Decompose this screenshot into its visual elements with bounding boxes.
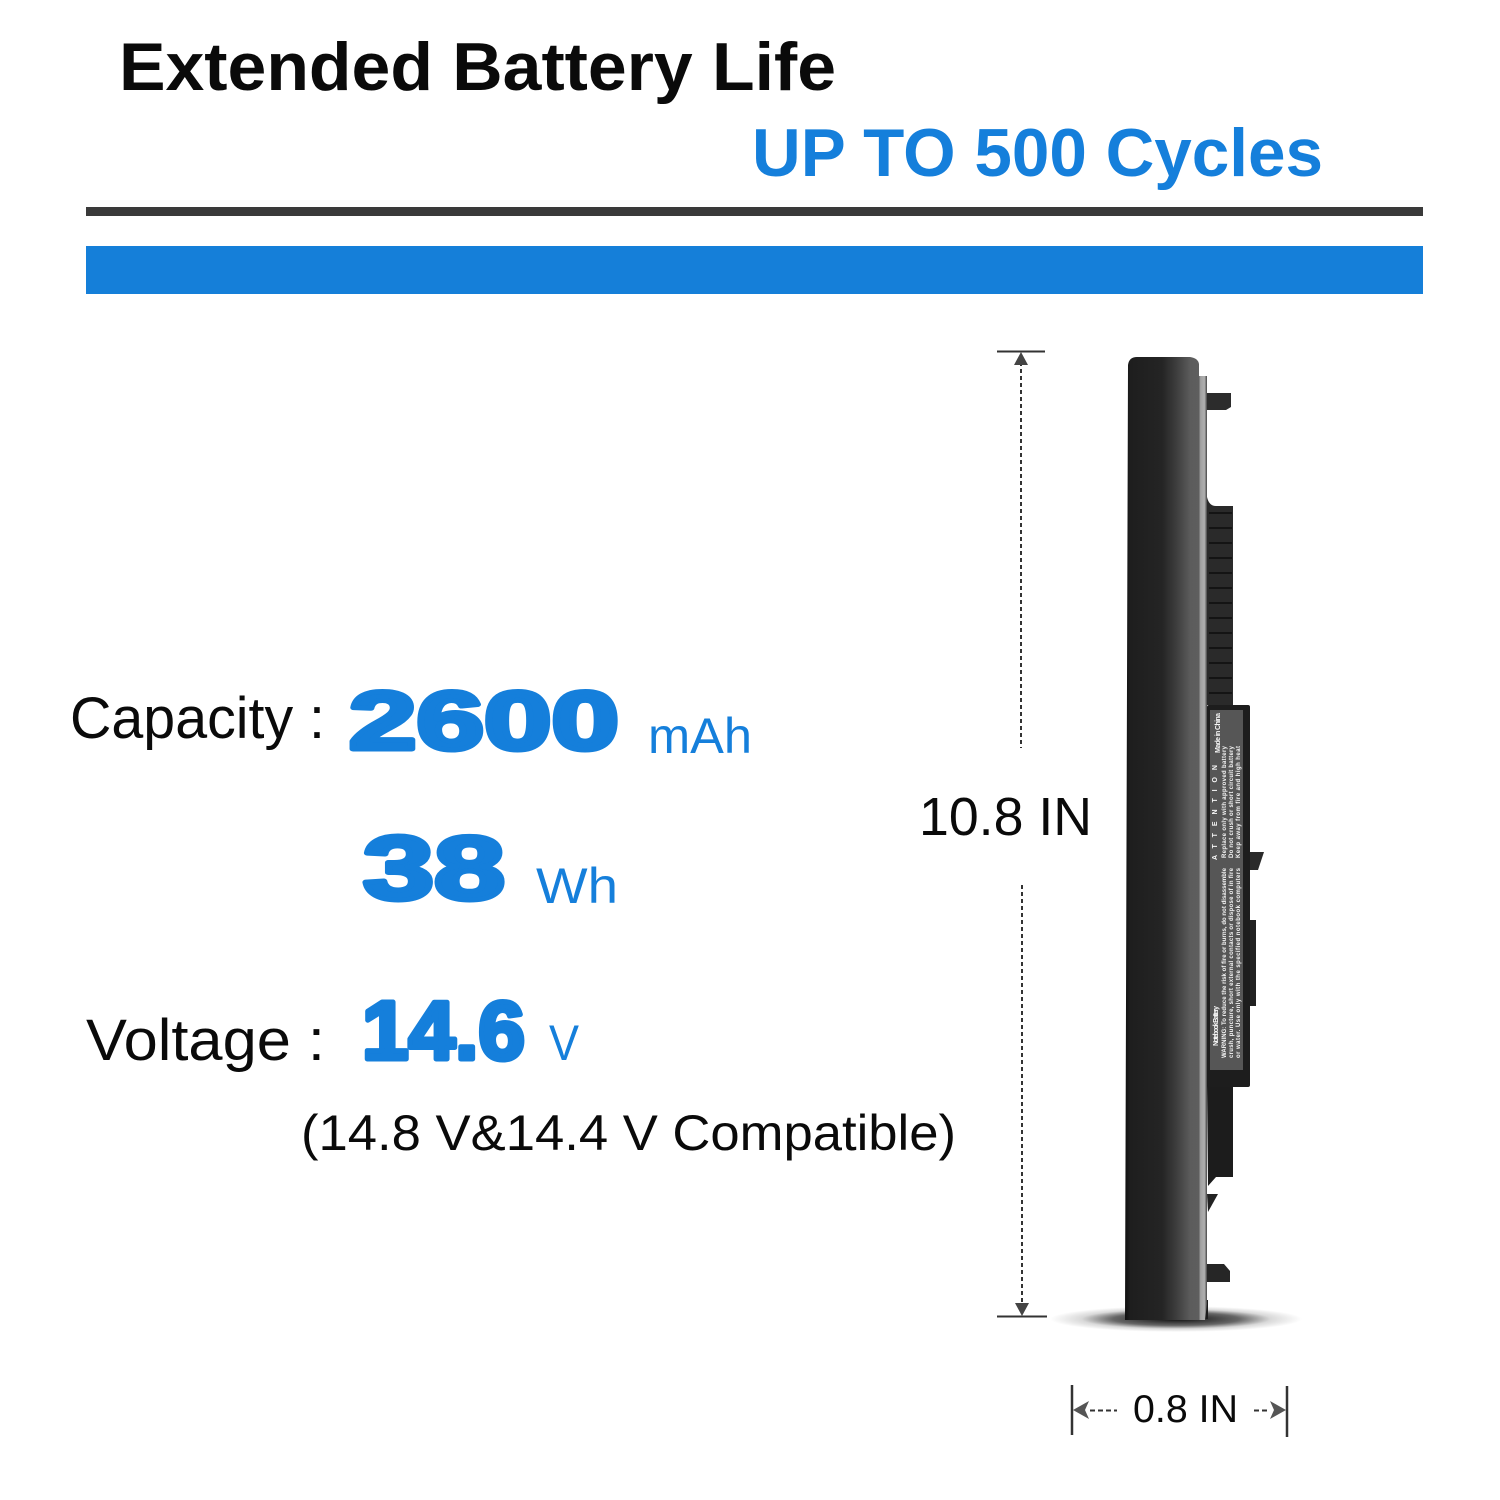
height label: 10.8 IN <box>919 787 1092 847</box>
grey label <box>1210 710 1243 1070</box>
voltage unit: V <box>549 1015 580 1071</box>
spec: voltage <box>86 984 956 1161</box>
battery illustration <box>1050 357 1302 1332</box>
label text: Made in China <box>1215 713 1222 753</box>
title: Extended Battery Life <box>119 29 836 105</box>
label text: crush, puncture, short external contacts or dispose of in fire <box>1229 867 1235 1058</box>
bottom clip tab <box>1205 1264 1230 1282</box>
width label: 0.8 IN <box>1133 1388 1238 1431</box>
voltage value: 14.6 <box>362 984 525 1077</box>
label text: Notebook Battery <box>1213 1006 1220 1046</box>
label plate <box>1207 705 1250 1087</box>
blue header band <box>86 246 1423 294</box>
capacity value: 2600 <box>349 674 619 767</box>
width dimension <box>1072 1385 1287 1437</box>
lower wedge tab <box>1207 1194 1218 1212</box>
label text: Keep away from fire and high heat <box>1236 746 1242 858</box>
energy unit: Wh <box>536 858 618 914</box>
height dimension <box>919 352 1092 1316</box>
ground shadow <box>1050 1306 1302 1332</box>
label text: Replace only with approved battery <box>1222 745 1228 858</box>
capacity unit: mAh <box>648 708 752 764</box>
label text: WARNING: To reduce the risk of fire or burns, do not disassemble <box>1222 867 1228 1058</box>
subtitle: cycles: UP TO 500 Cycles <box>752 115 1323 191</box>
spec: energy <box>363 819 618 919</box>
height dimension line <box>997 352 1047 1316</box>
label text: ATTENTION <box>1212 765 1219 860</box>
side rail <box>1250 920 1256 1006</box>
spec: capacity <box>70 674 752 767</box>
label text: or water. Use only with the specified notebook computers <box>1236 867 1242 1058</box>
lower connector <box>1207 1085 1233 1186</box>
label text: Do not crush or short circuit battery <box>1229 745 1235 858</box>
battery body <box>1125 357 1207 1320</box>
voltage label: Voltage : <box>86 1008 325 1073</box>
upper connector ridges <box>1207 497 1233 705</box>
bottom foot <box>1198 1300 1208 1319</box>
dark header rule <box>86 207 1423 216</box>
label text <box>1212 713 1242 1058</box>
capacity label: Capacity : <box>70 686 325 751</box>
energy value: 38 <box>363 819 505 919</box>
side tab <box>1250 852 1264 870</box>
width dimension line <box>1072 1385 1287 1437</box>
top clip tab <box>1207 393 1231 410</box>
voltage compatibility note: (14.8 V&14.4 V Compatible) <box>301 1105 956 1161</box>
